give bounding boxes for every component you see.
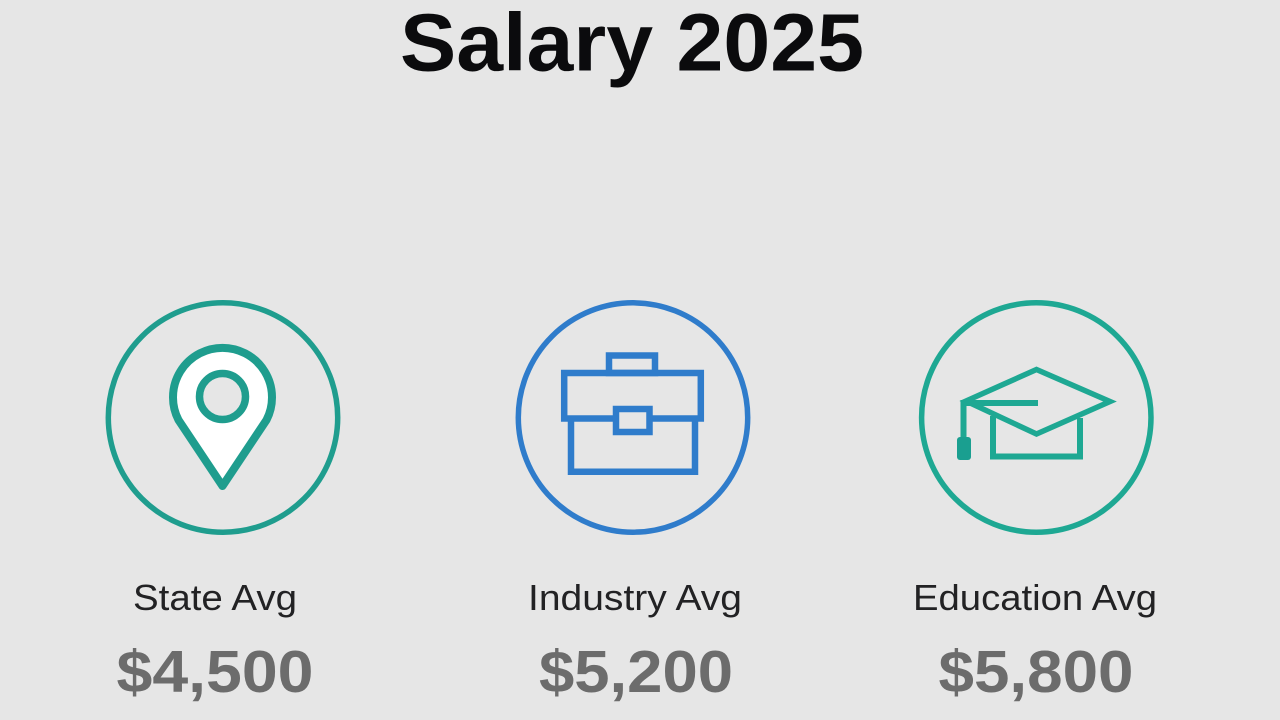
value: education avg: $5,800 (938, 639, 1134, 705)
title: Salary 2025 (400, 0, 864, 88)
label: education avg: Education Avg (913, 577, 1157, 618)
label: state avg: State Avg (133, 577, 297, 618)
value: state avg: $4,500 (116, 639, 314, 705)
icon: briefcase (518, 303, 748, 532)
label: industry avg: Industry Avg (528, 577, 742, 618)
icon: graduation cap (922, 303, 1151, 532)
panel: industry average (518, 303, 748, 705)
panel: state average (108, 303, 338, 705)
panel: education average (913, 303, 1157, 705)
value: industry avg: $5,200 (539, 639, 733, 705)
icon: location pin (108, 303, 338, 532)
